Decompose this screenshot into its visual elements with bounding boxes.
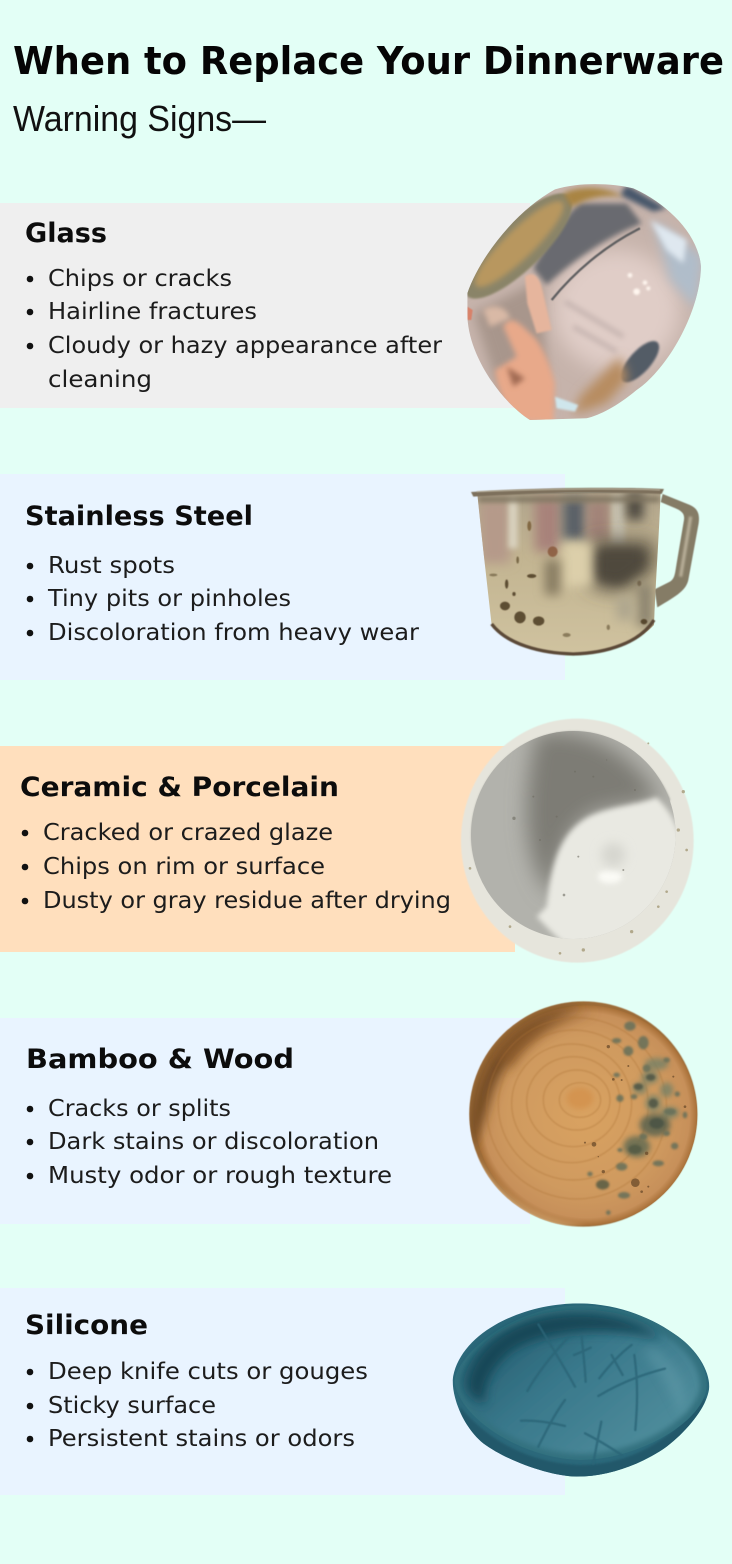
list: bamboo warning signs: Musty odor or rough texture bbox=[48, 1161, 392, 1189]
panel: silicone bbox=[0, 1288, 565, 1495]
list: stainless steel warning signs: Rust spots bbox=[48, 551, 175, 579]
heading: stainless steel: Stainless Steel bbox=[25, 501, 253, 532]
list: ceramic warning signs: Dusty or gray residue after drying bbox=[43, 886, 451, 914]
list: bamboo warning signs: Dark stains or discoloration bbox=[48, 1127, 379, 1155]
title: When to Replace Your Dinnerware bbox=[13, 39, 724, 83]
icon: rusty steel mug photo bbox=[471, 488, 699, 657]
panel: bamboo and wood bbox=[0, 1018, 530, 1224]
list: ceramic warning signs bbox=[22, 818, 451, 914]
list: silicone warning signs: Deep knife cuts or gouges bbox=[48, 1357, 368, 1385]
panel: stainless steel bbox=[0, 474, 565, 680]
list: silicone warning signs bbox=[27, 1357, 368, 1452]
heading: ceramic and porcelain: Ceramic & Porcelain bbox=[20, 772, 339, 803]
list: stainless steel warning signs: Tiny pits or pinholes bbox=[47, 584, 291, 612]
list: stainless steel warning signs: Discoloration from heavy wear bbox=[48, 618, 419, 646]
list: glass warning signs: cleaning bbox=[48, 365, 152, 393]
list: stainless steel warning signs bbox=[27, 551, 419, 646]
list: bamboo warning signs: Cracks or splits bbox=[48, 1094, 231, 1122]
list: ceramic warning signs: Cracked or crazed glaze bbox=[43, 818, 333, 846]
list: silicone warning signs: Persistent stains or odors bbox=[48, 1424, 355, 1452]
panel: ceramic and porcelain bbox=[0, 746, 515, 952]
list: glass warning signs bbox=[27, 264, 442, 393]
panel: glass bbox=[0, 203, 530, 408]
icon: moldy wooden plate photo bbox=[469, 1001, 697, 1230]
heading: bamboo and wood: Bamboo & Wood bbox=[26, 1044, 294, 1075]
list: silicone warning signs: Sticky surface bbox=[48, 1391, 216, 1419]
list: ceramic warning signs: Chips on rim or surface bbox=[43, 852, 325, 880]
icon: glass bowl photo bbox=[467, 184, 701, 420]
heading: silicone: Silicone bbox=[25, 1310, 148, 1341]
icon: ceramic bowl photo bbox=[461, 719, 694, 963]
icon: cut silicone plate photo bbox=[452, 1303, 710, 1477]
list: glass warning signs: Chips or cracks bbox=[48, 264, 232, 292]
subtitle: Warning Signs— bbox=[13, 98, 266, 139]
list: glass warning signs: Cloudy or hazy appearance after bbox=[48, 331, 442, 359]
list: glass warning signs: Hairline fractures bbox=[48, 297, 257, 325]
list: bamboo warning signs bbox=[27, 1094, 392, 1189]
heading: glass: Glass bbox=[25, 218, 107, 249]
